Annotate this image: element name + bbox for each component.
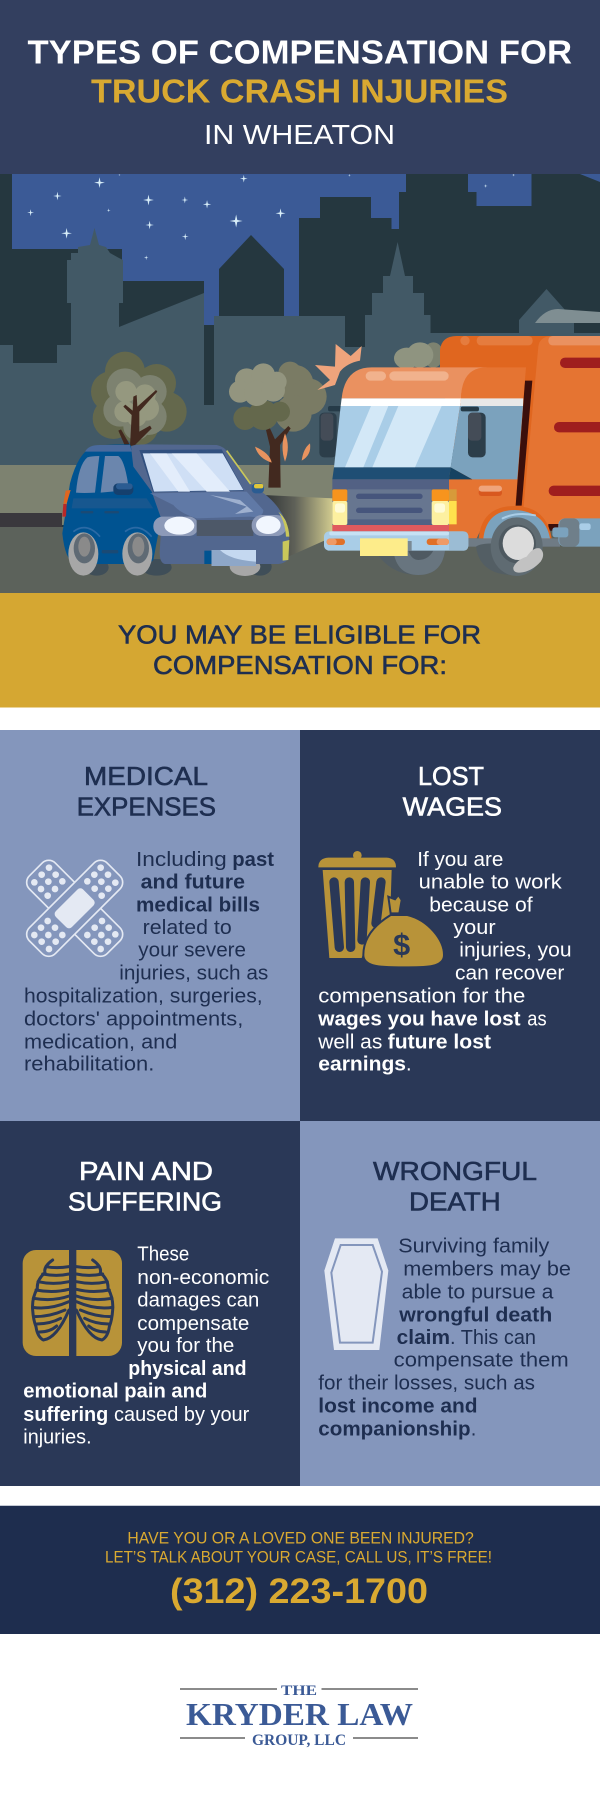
- truck front wheel: [375, 551, 445, 575]
- panel: wrongful death: [300, 1121, 600, 1486]
- body text: lost wages: If you are: [417, 849, 503, 871]
- body text: pain and suffering: These: [137, 1244, 189, 1266]
- body text: lost wages: .: [406, 1054, 412, 1076]
- phone number: (312) 223-1700: [170, 1572, 428, 1611]
- truck fuel tank: [552, 518, 600, 547]
- smoke plume: [535, 309, 600, 323]
- body text: lost wages: injuries, you: [459, 940, 572, 962]
- body text: lost wages: earnings: [318, 1054, 406, 1076]
- body text: lost wages: future lost: [388, 1031, 491, 1053]
- body text: wrongful death: wrongful death: [398, 1304, 552, 1326]
- body text: pain and suffering: you for the: [137, 1335, 234, 1357]
- heading: wrongful death: DEATH: [409, 1187, 501, 1217]
- body text: medical expenses: past: [232, 849, 274, 871]
- body text: medical expenses: medication, and: [24, 1031, 177, 1053]
- body text: lost wages: compensation for the: [318, 986, 525, 1008]
- truck rear wheel: [468, 506, 560, 576]
- eligibility banner: COMPENSATION FOR:: [153, 650, 447, 680]
- heading: wrongful death: WRONGFUL: [373, 1156, 537, 1186]
- body text: medical expenses: doctors' appointments,: [24, 1008, 243, 1030]
- icon: coffin: [324, 1238, 388, 1350]
- call to action band: HAVE YOU OR A LOVED ONE BEEN INJURED?: [127, 1529, 474, 1547]
- panel: medical expenses: [0, 730, 300, 1121]
- body text: pain and suffering: injuries.: [23, 1427, 92, 1449]
- body text: medical expenses: your severe: [138, 940, 246, 962]
- icon: rib cage: [23, 1250, 122, 1356]
- body text: medical expenses: related to: [143, 917, 232, 939]
- headlight beam: [263, 495, 333, 557]
- body text: pain and suffering: compensate: [137, 1313, 249, 1335]
- title: TYPES OF COMPENSATION FOR: [28, 33, 572, 70]
- body text: pain and suffering: damages can: [137, 1290, 259, 1312]
- body text: medical expenses: medical bills: [136, 894, 260, 916]
- logo: The Kryder Law Group, LLC: KRYDER LAW: [186, 1696, 413, 1732]
- lighter skyline: [0, 228, 600, 470]
- tree left: [91, 352, 187, 446]
- body text: wrongful death: compensate them: [394, 1350, 569, 1372]
- truck and crash burst: [315, 336, 600, 576]
- logo: The Kryder Law Group, LLC: [180, 1683, 418, 1749]
- body text: lost wages: unable to work: [419, 872, 563, 894]
- body text: pain and suffering: caused by your: [114, 1404, 250, 1426]
- crash burst: [315, 344, 362, 390]
- night sky: [12, 174, 600, 325]
- truck: [319, 336, 600, 576]
- body text: pain and suffering: [23, 1244, 269, 1449]
- tree right: [229, 362, 327, 488]
- road: [0, 527, 600, 593]
- panel: lost wages: [300, 730, 600, 1121]
- body text: medical expenses: and future: [141, 872, 245, 894]
- body text: lost wages: [317, 849, 572, 1076]
- heading: medical expenses: [77, 761, 216, 822]
- icon: trash can and money bag: [318, 851, 444, 967]
- heading: pain and suffering: SUFFERING: [68, 1187, 222, 1217]
- heading: pain and suffering: [68, 1156, 222, 1217]
- body text: wrongful death: .: [471, 1418, 476, 1440]
- eligibility banner: YOU MAY BE ELIGIBLE FOR: [118, 619, 481, 649]
- heading: pain and suffering: PAIN AND: [79, 1156, 213, 1186]
- illustration: truck crash at night: [0, 173, 600, 594]
- body text: lost wages: as: [527, 1008, 547, 1030]
- body text: wrongful death: able to pursue a: [402, 1282, 554, 1304]
- body text: wrongful death: lost income and: [318, 1396, 478, 1418]
- heading: wrongful death: [373, 1156, 537, 1217]
- body text: wrongful death: companionship: [318, 1418, 471, 1440]
- body text: pain and suffering: suffering: [23, 1404, 108, 1426]
- body text: lost wages: your: [453, 917, 496, 939]
- title: TRUCK CRASH INJURIES: [91, 72, 508, 109]
- stars: [27, 173, 515, 260]
- subtitle: IN WHEATON: [204, 119, 395, 150]
- body text: medical expenses: hospitalization, surgeries,: [24, 986, 263, 1008]
- car: [62, 444, 289, 576]
- body text: wrongful death: Surviving family: [398, 1236, 549, 1258]
- body text: pain and suffering: physical and: [128, 1358, 247, 1380]
- heading: lost wages: WAGES: [403, 792, 502, 822]
- body text: lost wages: because of: [429, 894, 533, 916]
- body text: wrongful death: [318, 1236, 571, 1440]
- body text: wrongful death: members may be: [403, 1258, 571, 1280]
- body text: medical expenses: injuries, such as: [119, 962, 268, 984]
- body text: lost wages: wages you have lost: [317, 1008, 521, 1030]
- truck bumper: [324, 531, 468, 556]
- call to action band: LET’S TALK ABOUT YOUR CASE, CALL US, IT’S FREE!: [105, 1548, 492, 1566]
- heading: lost wages: LOST: [418, 761, 484, 791]
- body text: wrongful death: for their losses, such as: [318, 1372, 535, 1394]
- body text: medical expenses: rehabilitation.: [24, 1054, 154, 1076]
- heading: lost wages: [403, 761, 502, 822]
- header band: [0, 0, 600, 174]
- icon: trash can and money bag: $: [393, 928, 410, 962]
- body text: wrongful death: claim: [397, 1327, 450, 1349]
- call to action band: [0, 1505, 600, 1634]
- logo: The Kryder Law Group, LLC: THE: [281, 1683, 317, 1699]
- body text: lost wages: can recover: [455, 962, 565, 984]
- eligibility banner: [0, 593, 600, 708]
- body text: lost wages: well as: [317, 1031, 382, 1053]
- panel: pain and suffering: [0, 1121, 300, 1486]
- heading: medical expenses: EXPENSES: [77, 792, 216, 822]
- body text: medical expenses: Including: [136, 849, 227, 871]
- body text: pain and suffering: non-economic: [137, 1267, 269, 1289]
- logo: The Kryder Law Group, LLC: GROUP, LLC: [252, 1732, 346, 1749]
- body text: medical expenses: [24, 849, 274, 1076]
- sidewalk: [0, 465, 600, 525]
- heading: medical expenses: MEDICAL: [84, 761, 208, 791]
- icon: crossed bandages: [23, 856, 127, 960]
- smoke behind truck: [394, 342, 443, 369]
- trees, beam and car: [91, 352, 333, 557]
- title: [28, 33, 572, 109]
- body text: pain and suffering: emotional pain and: [23, 1381, 207, 1403]
- body text: wrongful death: . This can: [450, 1327, 536, 1349]
